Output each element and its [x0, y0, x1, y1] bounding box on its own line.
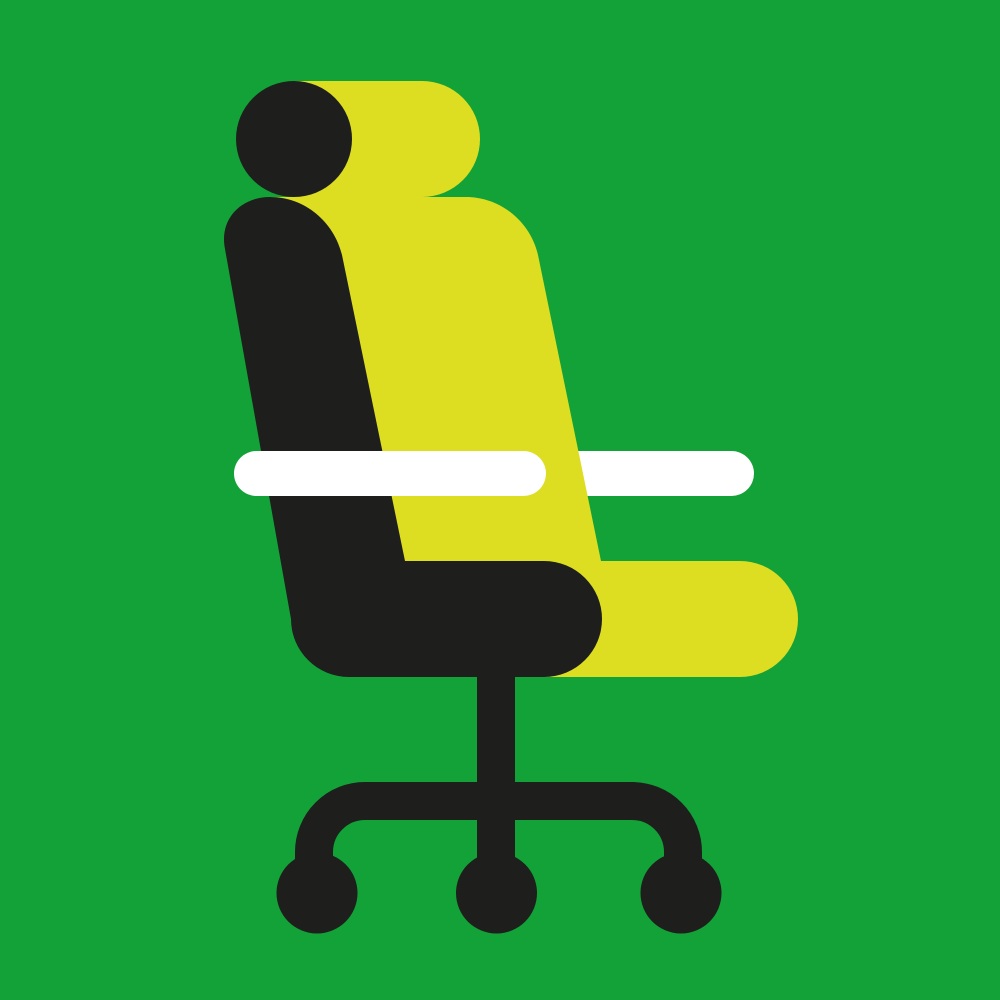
yellow seat [400, 561, 798, 677]
right wheel [640, 852, 722, 934]
left wheel [276, 852, 358, 934]
chair column [477, 670, 515, 870]
middle wheel [456, 852, 537, 934]
black headrest [236, 81, 352, 197]
chair base [314, 801, 683, 870]
black backrest and seat [224, 197, 602, 677]
far armrest [500, 451, 754, 496]
yellow headrest [294, 81, 480, 197]
near armrest [234, 451, 546, 496]
yellow backrest [270, 197, 601, 561]
